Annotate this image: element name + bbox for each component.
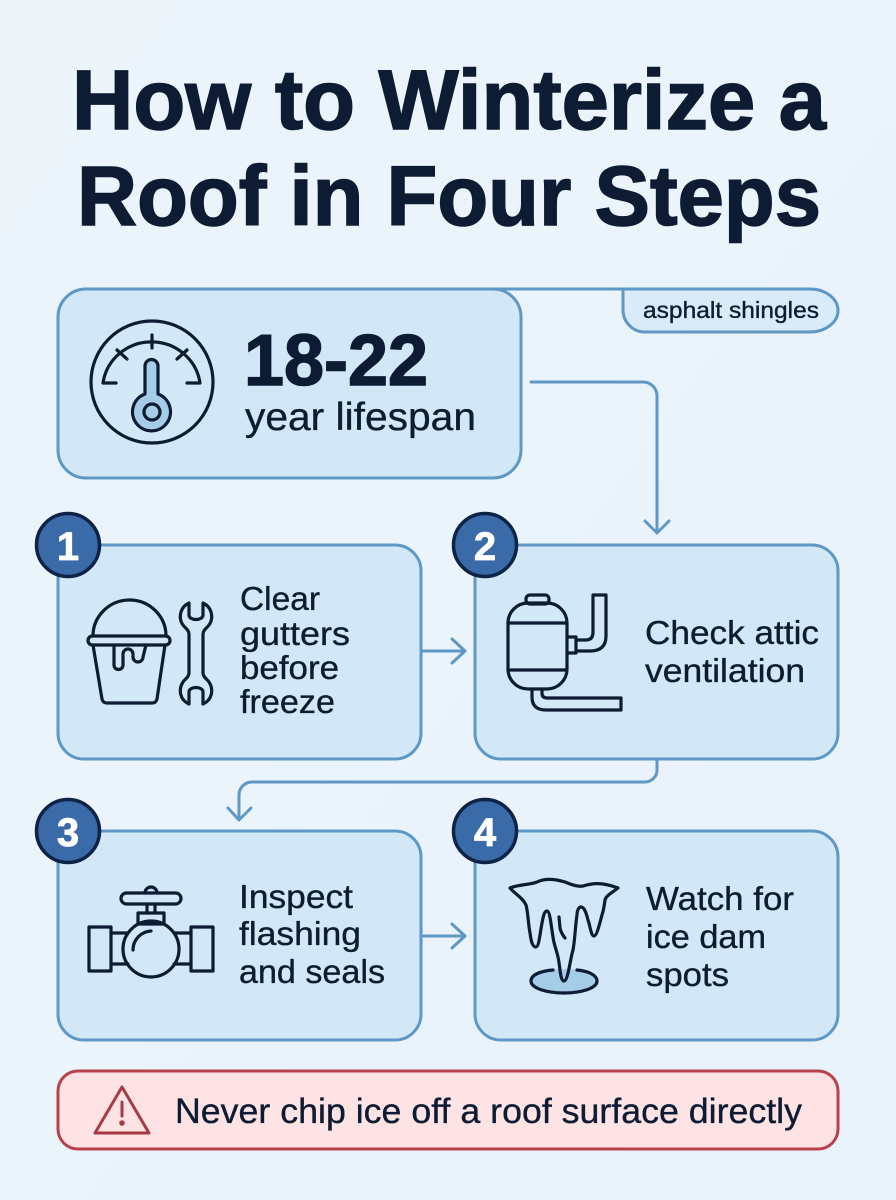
tag: asphalt shingles: asphalt shingles — [643, 297, 819, 323]
stat value: 18-22 — [244, 321, 428, 401]
step 3 text: and seals — [239, 953, 385, 990]
badge 3 — [36, 800, 100, 862]
icon: ventilation tank and pipes — [508, 595, 621, 710]
title — [72, 53, 827, 243]
arrow: lifespan to step 2 — [531, 382, 669, 533]
icon: warning triangle — [95, 1087, 149, 1133]
badge 4 — [454, 800, 516, 862]
step 4 text: spots — [646, 956, 729, 993]
panel: step 2 — [454, 514, 838, 759]
badge 3: 3 — [57, 811, 79, 855]
icon: icicle with puddle — [510, 879, 618, 993]
step 4 text: Watch for — [646, 880, 794, 917]
step 2 text: ventilation — [645, 652, 805, 689]
badge 4: 4 — [474, 811, 497, 855]
step 1 text — [240, 580, 350, 720]
icon: bucket — [88, 600, 170, 703]
panel: lifespan stat — [58, 289, 521, 478]
step 1 text: gutters — [240, 615, 350, 652]
panel: step 3 — [36, 800, 421, 1040]
icon: valve — [89, 887, 213, 977]
icon: wrench — [180, 603, 212, 704]
callout: warning — [58, 1071, 838, 1149]
arrow: step 1 to step 2 — [422, 639, 465, 663]
step 2 text — [645, 614, 819, 689]
title: How to Winterize a — [72, 53, 827, 147]
arrow: step 2 to step 3 — [228, 760, 657, 820]
panel: step 1 — [36, 514, 421, 759]
icon: gauge — [91, 321, 213, 443]
tag: asphalt shingles — [493, 289, 838, 332]
step 1 text: Clear — [240, 580, 320, 617]
step 2 text: Check attic — [645, 614, 819, 651]
step 4 text — [646, 880, 794, 993]
arrow: step 3 to step 4 — [422, 924, 465, 948]
badge 2 — [454, 514, 516, 576]
step 3 text: Inspect — [239, 878, 353, 915]
badge 2: 2 — [474, 525, 496, 569]
step 3 text: flashing — [239, 915, 361, 952]
badge 1 — [36, 514, 100, 576]
title: Roof in Four Steps — [77, 149, 821, 243]
step 3 text — [239, 878, 385, 990]
step 1 text: before — [240, 649, 339, 686]
step 4 text: ice dam — [646, 918, 766, 955]
panel: step 4 — [454, 800, 838, 1040]
badge 1: 1 — [57, 525, 79, 569]
warning text: Never chip ice off a roof surface directly — [175, 1092, 803, 1131]
step 1 text: freeze — [240, 683, 335, 720]
stat caption: year lifespan — [245, 396, 476, 439]
